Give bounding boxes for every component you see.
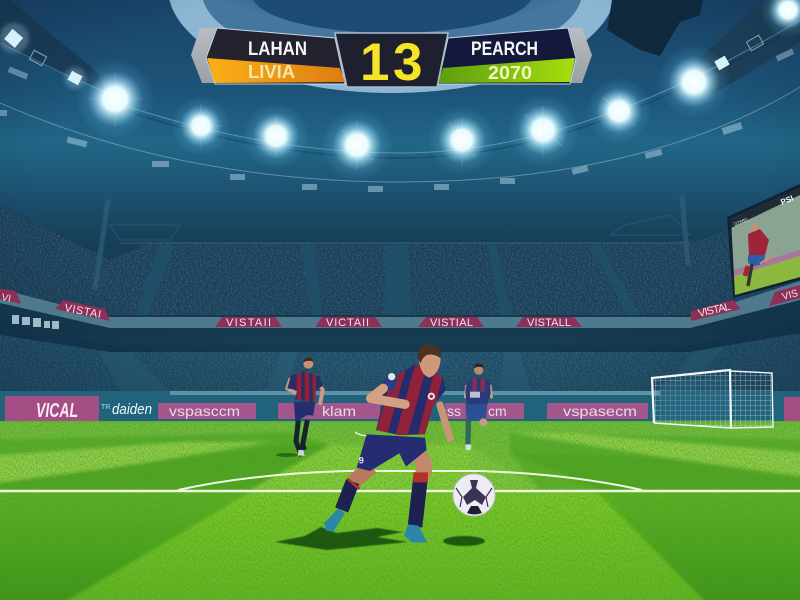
right plate — [570, 28, 592, 83]
roof: central dome opening — [168, 0, 703, 93]
ad: klam — [278, 403, 380, 419]
player: main striker: 9 — [359, 455, 364, 465]
banner: vistai left: VISTAI — [63, 302, 102, 321]
pitch — [0, 421, 800, 600]
ad: ssem — [445, 403, 524, 419]
banner: right far: VIS — [781, 288, 800, 303]
shadows on pitch — [275, 453, 485, 550]
head — [418, 354, 441, 378]
banner: vistal right: VISTAL — [697, 301, 732, 320]
score box: 3 — [393, 33, 422, 92]
player: right background — [463, 364, 493, 450]
ad: vspasecm left — [158, 403, 256, 419]
ad: vical: VICAL — [36, 400, 78, 422]
football — [453, 474, 495, 516]
front leg — [404, 453, 428, 542]
ad: right edge — [784, 397, 800, 423]
banner: vistal right — [691, 300, 741, 321]
shorts — [357, 434, 427, 471]
balcony band with sponsor banners — [0, 281, 800, 329]
video screen: PSI — [779, 194, 795, 207]
shirt — [376, 364, 446, 435]
ad: vspasecm left: vspasccm — [169, 403, 240, 419]
back leg — [324, 467, 372, 532]
floodlights — [0, 0, 800, 181]
upper stand crowd — [0, 205, 800, 315]
ad: ssem: ss — [447, 403, 461, 419]
flood panels — [4, 29, 730, 85]
ad: daiden: TR — [101, 404, 110, 411]
home team panel — [206, 28, 345, 84]
ad: vical — [5, 396, 99, 422]
screen player — [745, 224, 772, 286]
banner: vistai left far — [0, 289, 21, 305]
ad: daiden: daiden — [112, 401, 152, 418]
banner: vistall — [516, 317, 582, 329]
banner: victaii — [315, 317, 382, 329]
away team panel: PEARCH — [471, 39, 538, 60]
ad: ssem: cm — [488, 403, 507, 419]
small roof fixtures — [0, 48, 794, 192]
roof side strips with floodlight panels — [0, 0, 800, 95]
vignette — [0, 0, 800, 425]
away team panel — [438, 28, 576, 84]
player: main striker — [324, 344, 450, 542]
player: left background — [283, 358, 327, 456]
score box — [335, 33, 448, 92]
banner: vistial: VISTIAL — [430, 317, 473, 329]
banner: vistai left — [55, 300, 110, 321]
banner: victaii: VICTAII — [326, 317, 369, 329]
lower stand crowd — [0, 333, 800, 391]
roof rings — [0, 20, 800, 182]
score graphic — [191, 28, 592, 92]
banner: vistial — [418, 317, 484, 329]
banner: vistai left far: VI — [0, 292, 12, 305]
stand structure beams — [95, 195, 690, 290]
video screen — [727, 184, 800, 298]
home team panel: LIVIA — [248, 62, 295, 82]
video screen: 02880 — [734, 217, 749, 228]
small stand sign — [12, 315, 59, 329]
left plate — [191, 28, 215, 83]
ad: vspasecm right — [547, 403, 648, 419]
goal with net — [652, 370, 773, 428]
away team panel: 2070 — [488, 63, 532, 83]
home team panel: LAHAN — [248, 39, 307, 60]
pitch stripes — [0, 421, 800, 600]
banner: vistall: VISTALL — [527, 317, 571, 329]
score box: 1 — [360, 33, 389, 92]
banner: right far — [769, 285, 800, 306]
ad: klam: klam — [322, 403, 356, 419]
raised arm and hand — [371, 388, 405, 404]
banner: vistaii — [215, 317, 282, 329]
banner: vistaii: VISTAII — [226, 317, 271, 329]
pitch lines — [0, 432, 800, 491]
advertising board wall — [0, 391, 800, 423]
ad: vspasecm right: vspasecm — [563, 403, 637, 419]
